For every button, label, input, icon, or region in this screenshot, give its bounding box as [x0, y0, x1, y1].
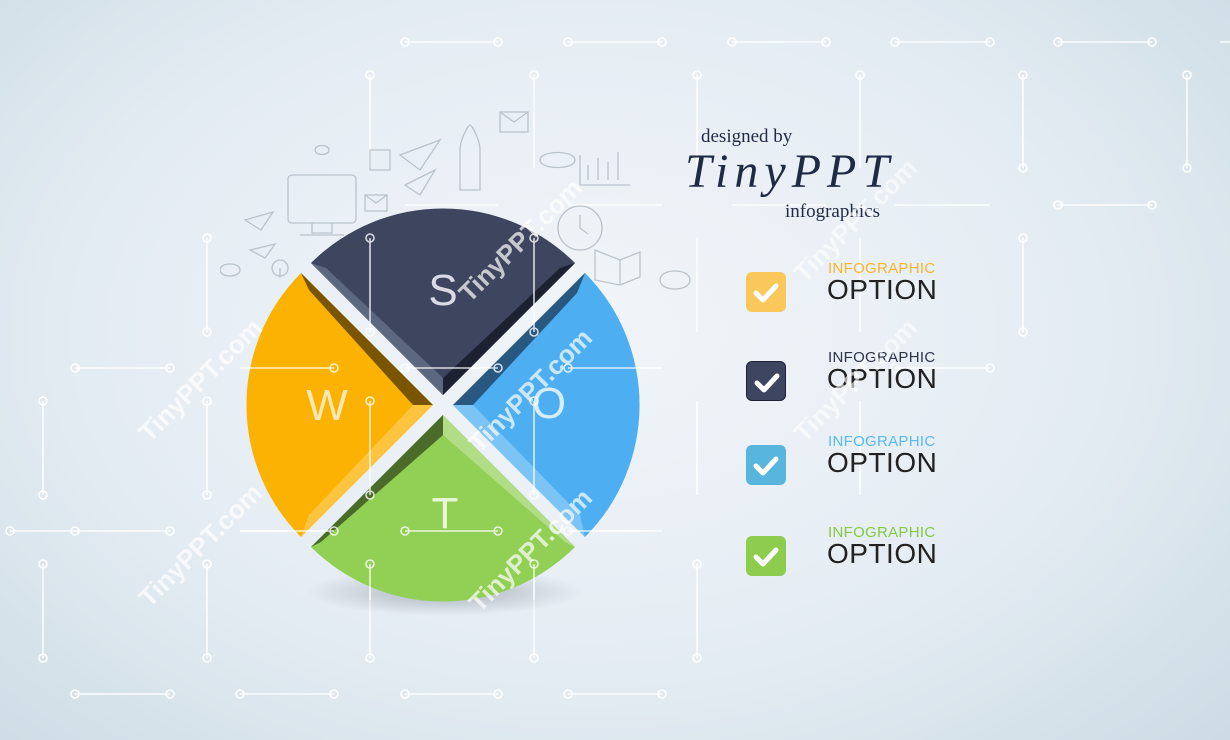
- option 1: OPTION: [827, 274, 937, 305]
- segment O: [453, 273, 640, 537]
- segment S: S: [428, 266, 458, 315]
- option 3: OPTION: [827, 447, 937, 478]
- option 1: [746, 260, 937, 312]
- option 3: INFOGRAPHIC: [828, 433, 935, 450]
- segment T: T: [432, 489, 458, 538]
- option 2: OPTION: [827, 363, 937, 394]
- option 4: [746, 524, 937, 576]
- watermarks: TinyPPT.com: [133, 312, 268, 448]
- watermarks: TinyPPT.com: [463, 322, 598, 458]
- segment S: [311, 208, 575, 395]
- watermarks: TinyPPT.com: [133, 477, 268, 613]
- option 4: INFOGRAPHIC: [828, 524, 935, 541]
- logo: designed by TinyPPT: infographics: [785, 201, 880, 222]
- option 1: INFOGRAPHIC: [828, 260, 935, 277]
- segment W: [246, 273, 433, 537]
- logo: designed by TinyPPT: [685, 126, 895, 222]
- pie shadow: [305, 568, 585, 616]
- watermarks: TinyPPT.com: [453, 172, 588, 308]
- option 3: [746, 433, 937, 485]
- option 2: [746, 349, 937, 401]
- doodle icons cloud: [220, 111, 691, 290]
- watermarks: TinyPPT.com: [788, 312, 923, 448]
- segment T: [311, 415, 575, 602]
- logo: designed by TinyPPT: designed by: [701, 126, 792, 147]
- option 2: INFOGRAPHIC: [828, 349, 935, 366]
- segment O: O: [532, 379, 566, 428]
- segment W: W: [306, 381, 348, 430]
- option 4: OPTION: [827, 538, 937, 569]
- logo: designed by TinyPPT: TinyPPT: [685, 145, 895, 198]
- watermarks: TinyPPT.com: [463, 482, 598, 618]
- watermarks: TinyPPT.com: [788, 152, 923, 288]
